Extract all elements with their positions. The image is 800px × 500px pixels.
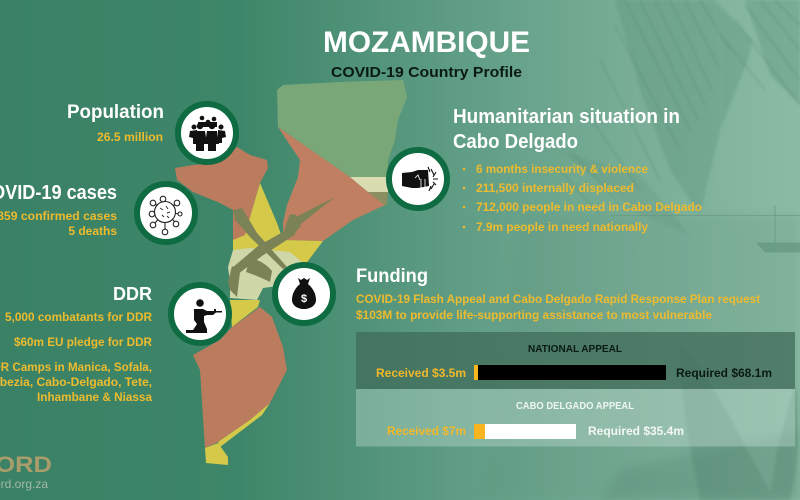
map: yellow lower band [230,300,260,327]
title: MOZAMBIQUE [323,26,530,59]
map: north-east provinces [278,127,385,241]
map: olive strip [368,192,388,205]
panel: Cabo Delgado appeal [356,389,795,446]
heading: population: Population [67,102,164,123]
panel: funding [356,266,760,322]
icon: money bag [275,265,333,323]
national appeal heading: NATIONAL APPEAL [528,344,622,355]
crossed rifles emblem [228,197,335,297]
funding description: $103M to provide life-supporting assistance to most vulnerable [356,308,712,322]
Cabo Delgado received label: Received $7m [387,424,466,438]
map: southern tip [205,443,228,465]
funding description: COVID-19 Flash Appeal and Cabo Delgado Rapid Response Plan request [356,292,760,306]
heading: humanitarian situation: Cabo Delgado [453,131,578,153]
funding description [356,292,760,322]
Cabo Delgado required label: Required $35.4m [588,424,684,438]
map: cream strip [350,177,388,192]
subtitle: COVID-19 Country Profile [331,64,522,81]
map: cream central provinces [228,248,302,300]
heading: DDR: DDR [113,284,152,304]
DDR camps: Inhambane & Niassa [37,390,152,404]
panel: population [67,102,236,162]
DDR combatants: 5,000 combatants for DDR [5,310,152,324]
humanitarian bullet list: 6 months insecurity & violence [476,162,648,176]
logo: ACCORD [0,452,52,491]
background: foreground leaves [680,345,798,500]
humanitarian bullet list: 211,500 internally displaced [476,181,634,195]
panel: COVID-19 cases [0,182,195,242]
map: yellow sliver [218,403,270,447]
background: boat [757,205,800,252]
icon: kneeling rifleman [171,285,229,343]
national bar chart [474,365,666,380]
map: central yellow province [233,183,323,265]
icon: people [178,104,236,162]
icon: fist impact [389,150,447,208]
map: northern province [277,80,407,177]
background: sea and beach [480,215,800,500]
map: western province [175,147,268,240]
panel: DDR [0,284,229,404]
heading: funding: Funding [356,266,428,287]
heading: humanitarian situation: Humanitarian situation in [453,106,680,128]
cases figures [0,209,117,238]
map of Mozambique [175,80,407,465]
population figure: 26.5 million [97,130,163,144]
national received label: Received $3.5m [376,366,466,380]
heading: humanitarian situation [453,106,680,153]
cases figures: 5 deaths [68,224,117,238]
humanitarian bullet list: 712,000 people in need in Cabo Delgado [476,200,702,214]
Cabo Delgado appeal heading: CABO DELGADO APPEAL [516,401,634,412]
icon: virus [137,184,195,242]
DDR camps [0,360,152,404]
DDR pledge: $60m EU pledge for DDR [14,335,152,349]
map: southern provinces [193,307,287,448]
national required label: Required $68.1m [676,366,772,380]
humanitarian bullet list: 7.9m people in need nationally [476,220,648,234]
background: palm fronds [560,0,800,235]
humanitarian bullet list [463,162,702,234]
panel: national appeal [356,332,795,389]
Cabo Delgado bar chart [474,424,576,439]
panel: humanitarian situation [453,106,702,234]
icon: money bag: $ [301,293,307,305]
